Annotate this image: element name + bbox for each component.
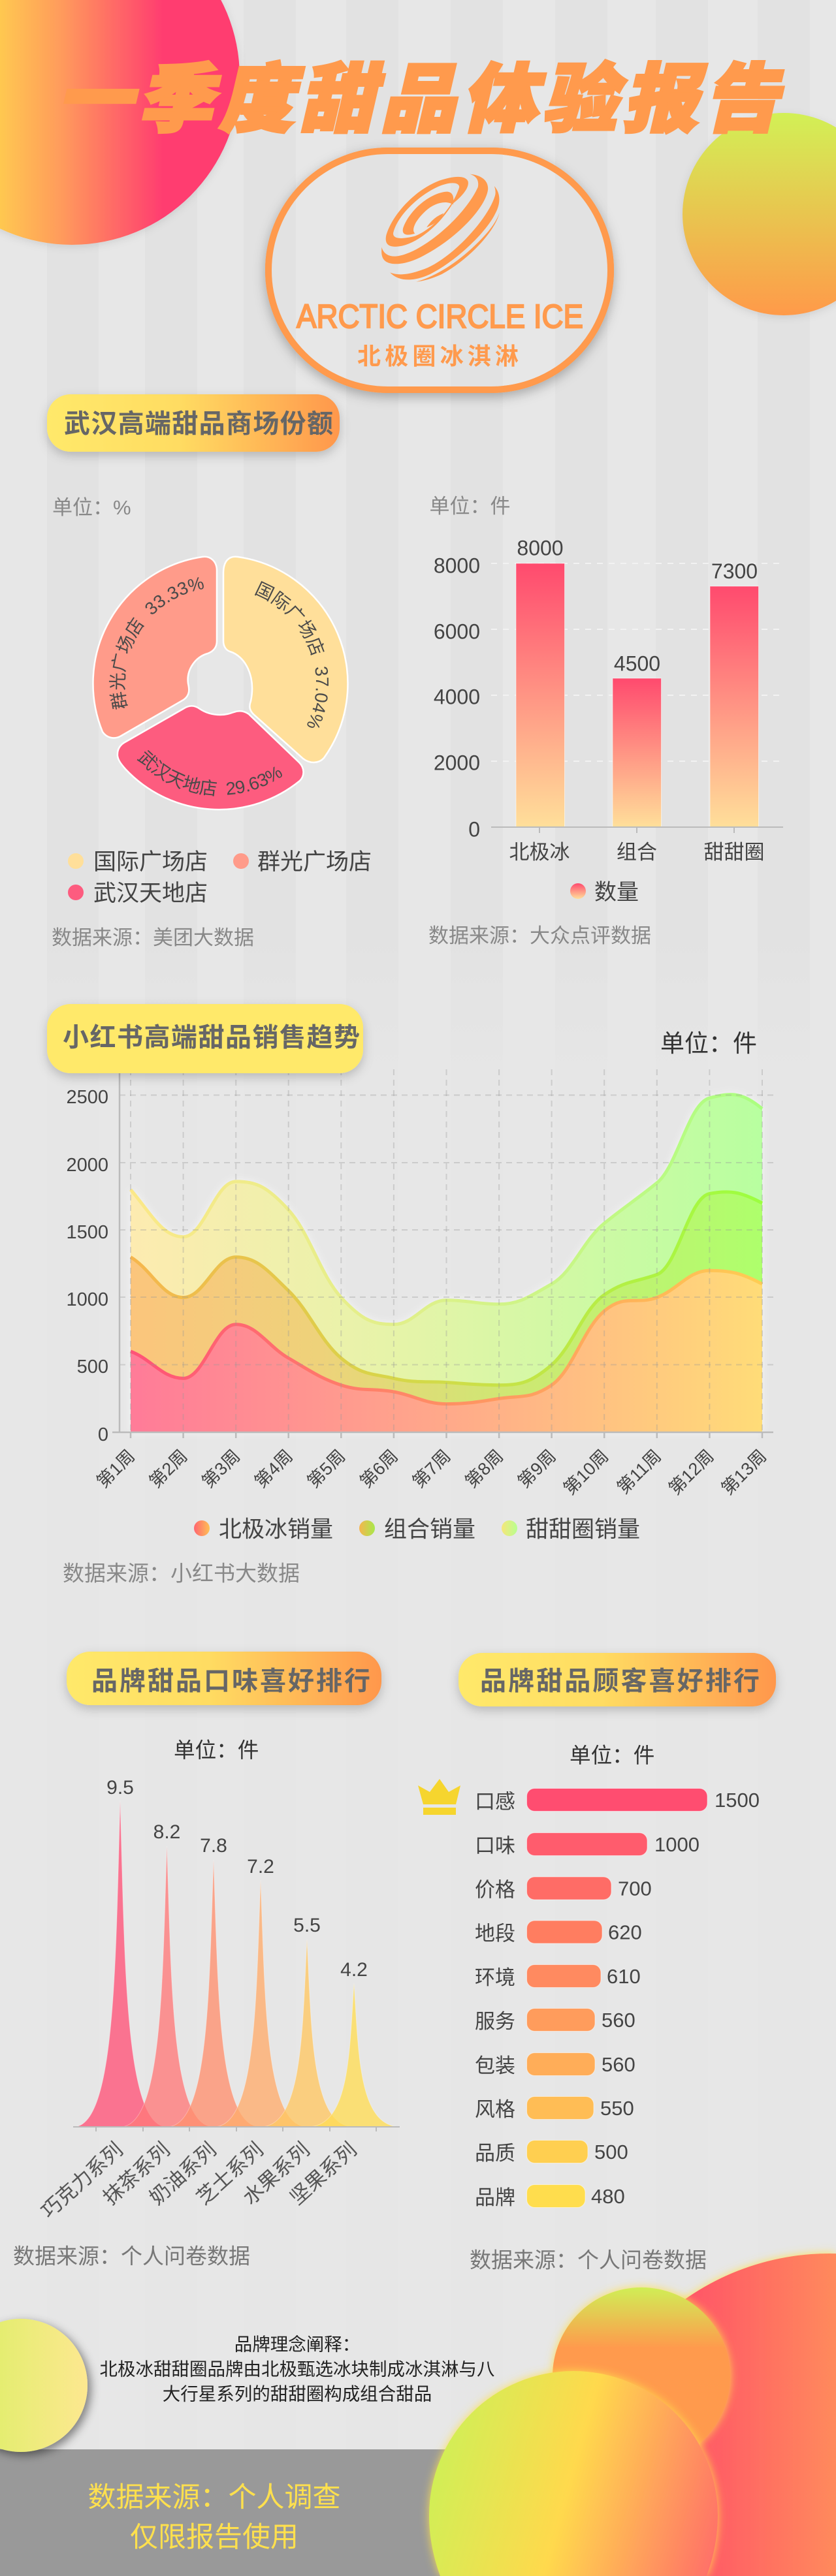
decorative circle: bottom right front (429, 2371, 718, 2576)
row labels: 环境 (475, 1966, 515, 1989)
bars (516, 563, 759, 827)
row labels: 地段 (475, 1922, 515, 1945)
heading: sales trend: 小红书高端甜品销售趋势 (63, 1024, 360, 1052)
row values: 480 (591, 2185, 625, 2208)
icon: crown (418, 1779, 460, 1815)
heading: customer ranking (458, 1653, 776, 1706)
row values: 560 (602, 2009, 635, 2032)
row labels: 包装 (475, 2054, 515, 2077)
peak values: 5.5 (293, 1915, 321, 1936)
peak values: 7.2 (247, 1856, 274, 1877)
peak values: 8.2 (153, 1821, 180, 1843)
x axis labels: 第3周 (198, 1446, 244, 1492)
decorative circle: bottom left (0, 2319, 88, 2452)
x axis labels: 第8周 (461, 1446, 507, 1492)
decorative circle: bottom right middle (553, 2287, 730, 2465)
row labels: 口感 (475, 1790, 515, 1814)
y axis values: 2000 (66, 1155, 108, 1176)
x axis labels: 第4周 (251, 1446, 297, 1492)
logo badge (259, 145, 620, 403)
category labels (509, 841, 764, 864)
x axis labels: 第5周 (304, 1446, 349, 1492)
row labels: 服务 (475, 2010, 515, 2033)
donut legend: 群光广场店 (257, 849, 372, 875)
category labels: 甜甜圈 (704, 841, 764, 864)
row values: 1500 (715, 1789, 760, 1812)
donut legend: 武汉天地店 (93, 881, 208, 906)
x axis labels: 第10周 (560, 1446, 613, 1499)
row labels: 风格 (475, 2098, 515, 2121)
decorative circle: top left (0, 0, 240, 245)
heading: flavor ranking (67, 1652, 381, 1705)
legend: 数量 (594, 880, 639, 905)
donut labels: 武汉天地店 29.63% (137, 749, 282, 796)
y axis values: 0 (98, 1424, 108, 1445)
bar values: 7300 (711, 559, 758, 583)
row values: 550 (600, 2097, 634, 2120)
y axis values: 1000 (66, 1289, 108, 1310)
legend: 甜甜圈销量 (526, 1517, 640, 1542)
donut labels: 群光广场店 33.33% (108, 577, 204, 710)
heading: customer ranking: 品牌甜品顾客喜好排行 (480, 1667, 760, 1696)
row labels (475, 1790, 515, 2209)
category labels: 芝士系列 (192, 2138, 268, 2209)
x axis labels (93, 1446, 770, 1499)
donut labels (108, 577, 329, 796)
footer text: 数据来源：个人调查 (88, 2482, 341, 2513)
unit label: 单位：件 (430, 495, 511, 518)
footer text (88, 2482, 341, 2553)
panel: donut chart (52, 496, 372, 949)
x axis labels: 第13周 (718, 1446, 770, 1499)
x axis labels: 第7周 (409, 1446, 455, 1492)
brand statement (99, 2334, 495, 2404)
row labels: 口味 (475, 1834, 515, 1857)
panel: area chart (63, 1069, 773, 1585)
decorative circle: bottom right large (579, 2254, 836, 2576)
y axis values: 0 (468, 817, 480, 841)
legend: 组合销量 (384, 1517, 475, 1542)
heading: sales trend (47, 1004, 363, 1073)
x axis labels: 第6周 (356, 1446, 402, 1492)
peak values: 4.2 (340, 1959, 368, 1981)
footer text: 仅限报告使用 (130, 2522, 298, 2553)
bar values: 8000 (517, 537, 564, 560)
panel: bar chart (428, 495, 783, 947)
heading: market share (47, 394, 340, 452)
brand statement: 品牌理念阐释： (234, 2334, 360, 2354)
peak values (106, 1777, 368, 1981)
data source: 数据来源：个人问卷数据 (470, 2248, 707, 2272)
category labels: 水果系列 (238, 2138, 314, 2209)
legend (570, 880, 639, 905)
row values: 610 (607, 1965, 641, 1988)
unit label: trend: 单位：件 (660, 1030, 757, 1057)
y axis values: 1500 (66, 1222, 108, 1243)
donut slices (93, 557, 348, 809)
logo english name: ARCTIC CIRCLE ICE (297, 298, 583, 335)
category labels: 巧克力系列 (37, 2138, 127, 2223)
heading: flavor ranking: 品牌甜品口味喜好排行 (91, 1667, 370, 1696)
unit label: 单位：件 (174, 1738, 259, 1762)
row values: 1000 (654, 1833, 699, 1856)
x axis labels: 第1周 (93, 1446, 138, 1492)
row values: 620 (608, 1921, 642, 1944)
unit label: 单位：% (52, 496, 131, 519)
x axis labels: 第9周 (514, 1446, 560, 1492)
donut labels: 国际广场店 37.04% (255, 581, 329, 729)
peaks (73, 1800, 401, 2127)
y axis values: 8000 (434, 554, 480, 577)
y axis values: 500 (77, 1357, 108, 1377)
x axis labels: 第11周 (613, 1446, 665, 1498)
category labels: 抹茶系列 (99, 2138, 174, 2209)
row labels: 品牌 (475, 2186, 515, 2209)
row values: 700 (618, 1877, 652, 1900)
peak values: 7.8 (200, 1835, 227, 1857)
y axis values (434, 554, 480, 841)
areas (131, 1095, 762, 1432)
category labels: 组合 (617, 841, 657, 864)
peak values: 9.5 (106, 1777, 134, 1798)
unit label: 单位：件 (570, 1743, 654, 1767)
brand statement: 北极冰甜甜圈品牌由北极甄选冰块制成冰淇淋与八 (99, 2359, 495, 2379)
icon: logo swirl (381, 174, 500, 282)
y axis values: 6000 (434, 620, 480, 644)
bar values (517, 537, 758, 675)
y axis values: 2000 (434, 751, 480, 774)
donut legend: 国际广场店 (93, 849, 208, 875)
row labels: 价格 (475, 1879, 515, 1901)
logo chinese name: 北极圈冰淇淋 (357, 343, 519, 369)
y axis values: 4000 (434, 685, 480, 709)
category labels: 奶油系列 (145, 2138, 221, 2209)
category labels: 坚果系列 (285, 2138, 361, 2209)
row labels: 品质 (475, 2142, 515, 2165)
panel: customer ranking bars (418, 1743, 760, 2272)
heading: market share: 武汉高端甜品商场份额 (64, 410, 333, 439)
bar values: 4500 (614, 652, 660, 675)
data source: 数据来源：大众点评数据 (428, 924, 651, 947)
footer band (0, 2449, 836, 2576)
title: 一季度甜品体验报告 (54, 58, 794, 142)
row values: 560 (602, 2053, 635, 2076)
data source: 数据来源：美团大数据 (52, 926, 254, 949)
legend: 北极冰销量 (219, 1517, 333, 1542)
brand statement: 大行星系列的甜甜圈构成组合甜品 (163, 2384, 432, 2404)
decorative circle: top right (683, 113, 836, 315)
x axis labels: 第12周 (665, 1446, 718, 1499)
x axis labels: 第2周 (146, 1446, 191, 1492)
donut legend (68, 849, 372, 906)
row values: 500 (594, 2141, 628, 2163)
data source: 数据来源：小红书大数据 (63, 1562, 300, 1585)
category labels: 北极冰 (509, 841, 570, 864)
y axis values: 2500 (66, 1087, 108, 1108)
ranking bars (526, 1789, 707, 2208)
y axis values (66, 1087, 108, 1445)
panel: flavor peak chart (13, 1738, 401, 2268)
data source: 数据来源：个人问卷数据 (13, 2244, 250, 2268)
row values (591, 1789, 760, 2208)
category labels (37, 2138, 361, 2223)
legend (194, 1517, 640, 1542)
